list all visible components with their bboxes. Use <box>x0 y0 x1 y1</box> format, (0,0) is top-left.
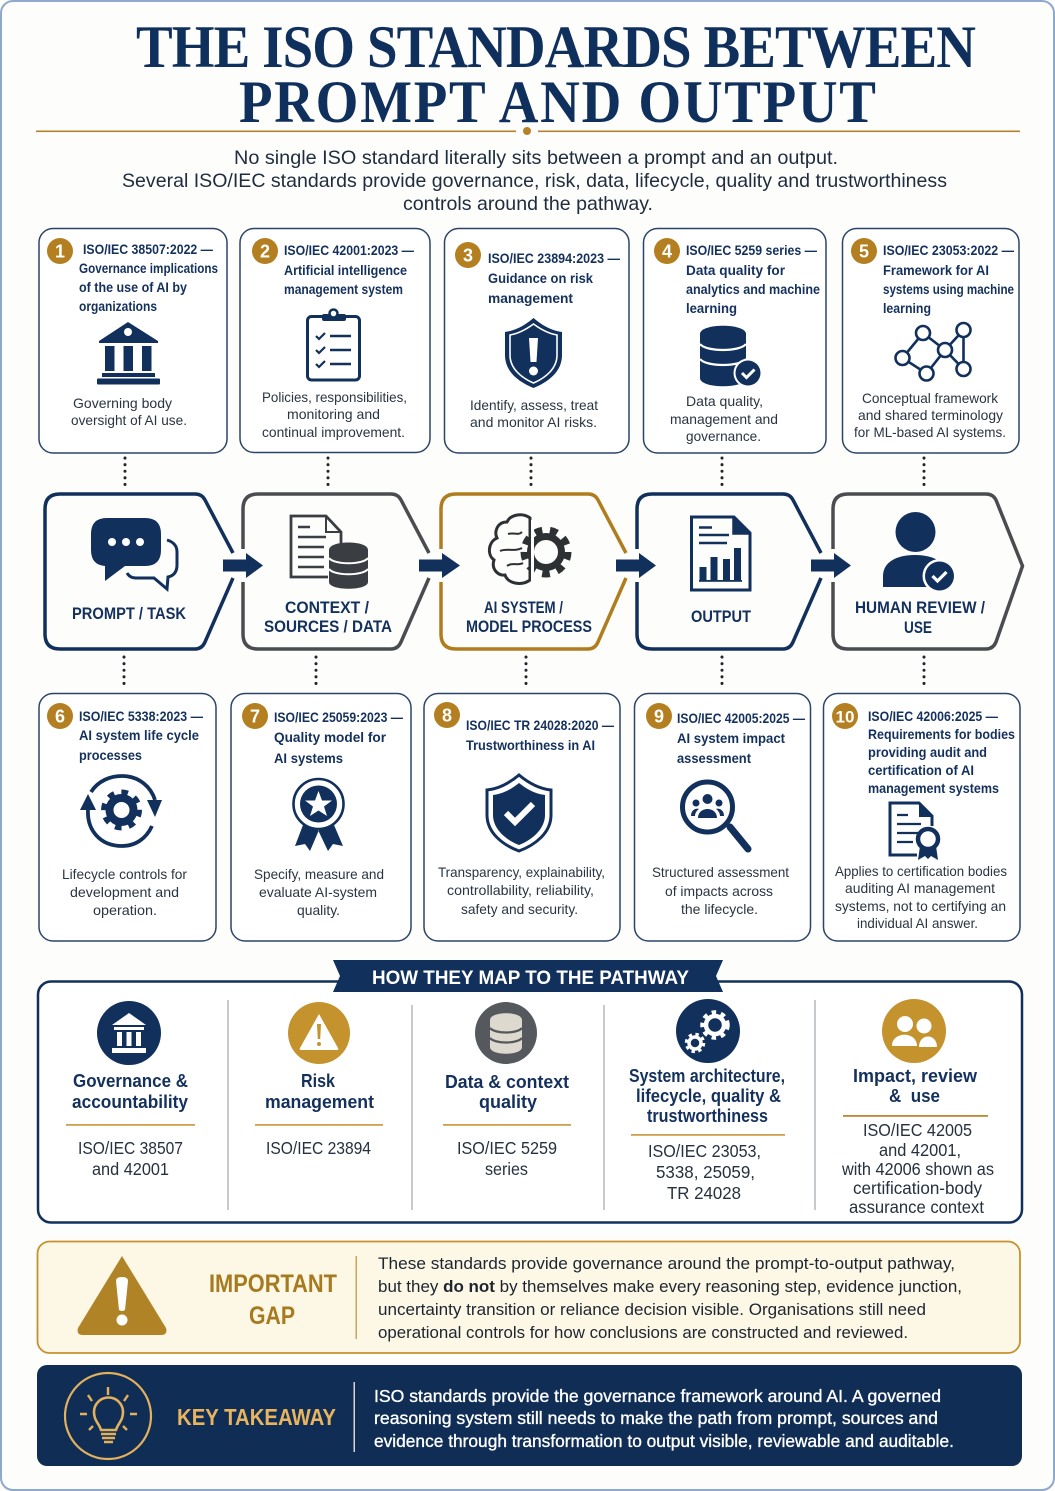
description: continual improvement. <box>262 424 405 440</box>
heading: ISO/IEC 23053:2022: systems using machine <box>883 281 1014 297</box>
heading: ISO/IEC 42006:2025: providing audit and <box>868 744 987 760</box>
heading: ISO/IEC 5259 series: analytics and machine <box>686 281 820 297</box>
badge 2 <box>252 238 278 264</box>
takeaway text: ISO standards provide the governance framework around AI. A governed <box>374 1386 941 1406</box>
heading: ISO/IEC 5259 series: learning <box>686 300 737 316</box>
icon: brain and gear <box>489 515 568 584</box>
gap text: uncertainty transition or reliance decision visible. Organisations still need <box>378 1300 926 1319</box>
description: and shared terminology <box>858 407 1003 423</box>
heading: ISO/IEC 23053:2022: Framework for AI <box>883 262 989 278</box>
column heading <box>629 1066 785 1126</box>
subtitle <box>122 147 947 215</box>
heading: ISO/IEC 42005:2025: AI system impact <box>677 730 785 746</box>
description <box>470 397 598 430</box>
standards list: ISO/IEC 42005 <box>863 1120 972 1140</box>
banner heading <box>333 960 723 992</box>
pathway step: human review / use <box>833 494 1022 649</box>
label <box>855 598 985 637</box>
description: controllability, reliability, <box>447 882 594 898</box>
column heading: Risk <box>301 1071 336 1091</box>
heading: ISO/IEC 25059:2023: Quality model for <box>274 729 387 745</box>
pathway step: prompt / task <box>45 494 233 649</box>
column heading: lifecycle, quality & <box>636 1086 781 1106</box>
column heading: Data & context <box>445 1072 569 1092</box>
badge 7: 7 <box>250 706 260 726</box>
label <box>466 598 592 636</box>
column heading <box>265 1071 374 1112</box>
heading: ISO/IEC 23053:2022: ISO/IEC 23053:2022 — <box>883 242 1014 258</box>
label <box>264 598 392 636</box>
standards list: ISO/IEC 23894 <box>266 1138 371 1158</box>
description <box>670 393 778 444</box>
label: SOURCES / DATA <box>264 617 392 636</box>
description: individual AI answer. <box>857 915 978 931</box>
badge 3: 3 <box>463 246 473 266</box>
column heading: Impact, review <box>853 1066 978 1086</box>
takeaway text: reasoning system still needs to make the path from prompt, sources and <box>374 1408 938 1428</box>
description: Policies, responsibilities, <box>262 389 407 405</box>
description <box>652 864 789 917</box>
takeaway text <box>374 1386 954 1451</box>
badge 5: 5 <box>859 242 869 262</box>
description: Structured assessment <box>652 864 789 880</box>
icon: clipboard checklist <box>308 310 360 380</box>
description <box>854 390 1006 440</box>
column heading: System architecture, <box>629 1066 785 1086</box>
description: management and <box>670 411 778 427</box>
badge 7 <box>242 703 268 729</box>
pathway step: context / sources / data <box>243 494 429 649</box>
pathway step: AI system / model process <box>441 494 626 649</box>
badge 9: 9 <box>654 706 664 726</box>
heading: ISO/IEC 42005:2025: ISO/IEC 42005:2025 — <box>677 710 805 726</box>
standards list: certification-body <box>853 1178 982 1198</box>
column: data <box>443 1002 571 1179</box>
arrow 1 <box>223 553 263 578</box>
standards list: with 42006 shown as <box>841 1159 994 1179</box>
badge 9 <box>646 703 672 729</box>
badge 6: 6 <box>55 706 65 726</box>
callout: key takeaway <box>37 1365 1022 1466</box>
heading: ISO/IEC 42001:2023: Artificial intelligence <box>284 262 407 278</box>
label: OUTPUT <box>691 607 752 626</box>
icon: shield with check <box>487 775 551 851</box>
heading: ISO/IEC 38507:2022 <box>79 241 218 314</box>
panel: standard 7 <box>231 694 411 941</box>
heading: ISO/IEC 25059:2023: ISO/IEC 25059:2023 — <box>274 709 403 725</box>
icon: certificate document <box>890 803 938 860</box>
label: CONTEXT / <box>285 598 369 617</box>
standards list <box>78 1138 183 1179</box>
panel: standard 2 <box>240 228 430 452</box>
badge 8 <box>434 702 460 728</box>
subtitle: No single ISO standard literally sits between a prompt and an output. <box>234 147 838 169</box>
column heading <box>72 1071 188 1112</box>
heading: ISO/IEC 23894:2023: Guidance on risk <box>488 270 593 286</box>
gap text: but they do not by themselves make every reasoning step, evidence junction, <box>378 1277 962 1296</box>
icon: institution building <box>97 322 160 384</box>
standards list: ISO/IEC 38507 <box>78 1138 183 1158</box>
description: Applies to certification bodies <box>835 863 1007 879</box>
heading: ISO/IEC 23894:2023: management <box>488 290 573 306</box>
description: for ML-based AI systems. <box>854 424 1006 440</box>
heading: ISO/IEC 42006:2025: certification of AI <box>868 762 974 778</box>
column heading: trustworthiness <box>647 1106 768 1126</box>
heading: ISO/IEC TR 24028:2020: Trustworthiness in AI <box>466 737 595 753</box>
heading: ISO/IEC 42006:2025: ISO/IEC 42006:2025 — <box>868 708 998 724</box>
heading: ISO/IEC 5259 series: ISO/IEC 5259 series — <box>686 242 817 258</box>
icon: light bulb <box>65 1373 151 1459</box>
column heading: accountability <box>72 1092 188 1112</box>
column heading <box>445 1072 569 1112</box>
label: PROMPT / TASK <box>72 604 187 623</box>
icon: magnifier over people <box>682 782 748 849</box>
description: Identify, assess, treat <box>470 397 598 413</box>
arrow 2 <box>419 553 460 578</box>
description: Data quality, <box>686 393 763 409</box>
icon: document and database <box>291 516 368 589</box>
icon: gears <box>676 999 740 1063</box>
panel: how they map to the pathway <box>38 960 1022 1222</box>
description: auditing AI management <box>845 880 995 896</box>
standards list: and 42001 <box>92 1159 169 1179</box>
column heading: management <box>265 1092 374 1112</box>
icon: warning triangle <box>78 1256 166 1335</box>
icon: rosette award <box>294 779 344 851</box>
panel: standard 3 <box>444 228 629 453</box>
gap heading <box>209 1270 337 1330</box>
callout: important gap <box>38 1242 1020 1353</box>
gap text: These standards provide governance around the prompt-to-output pathway, <box>378 1254 955 1273</box>
heading: ISO/IEC 5338:2023 <box>79 708 203 763</box>
standards list: and 42001, <box>879 1140 961 1160</box>
badge 3 <box>455 242 481 268</box>
description: Transparency, explainability, <box>438 864 605 880</box>
heading: ISO/IEC 38507:2022: organizations <box>79 298 157 314</box>
description <box>835 863 1007 931</box>
description <box>71 395 187 428</box>
gap text <box>378 1254 962 1342</box>
heading: ISO/IEC 25059:2023: AI systems <box>274 750 343 766</box>
icon: database with check <box>700 326 762 388</box>
heading: ISO/IEC 38507:2022: Governance implications <box>79 260 218 276</box>
label: AI SYSTEM / <box>484 598 563 617</box>
subtitle: Several ISO/IEC standards provide governance, risk, data, lifecycle, quality and trustworthiness <box>122 170 947 192</box>
heading: ISO/IEC 42006:2025 <box>868 708 1015 796</box>
heading: ISO/IEC 42006:2025: management systems <box>868 780 999 796</box>
description: Specify, measure and <box>254 866 384 882</box>
icon: warning <box>288 1002 350 1064</box>
heading: ISO/IEC 42001:2023: ISO/IEC 42001:2023 — <box>284 242 414 258</box>
gap heading: IMPORTANT <box>209 1270 337 1298</box>
description: Conceptual framework <box>862 390 999 406</box>
description: Governing body <box>73 395 172 411</box>
badge 8: 8 <box>442 706 452 726</box>
arrow 3 <box>616 553 656 578</box>
description <box>262 389 407 440</box>
description: development and <box>70 884 179 900</box>
heading: ISO/IEC TR 24028:2020: ISO/IEC TR 24028:2020 — <box>466 717 614 733</box>
description: systems, not to certifying an <box>835 898 1006 914</box>
description: governance. <box>686 428 761 444</box>
panel: standard 6 <box>39 694 216 941</box>
badge 5 <box>851 238 877 264</box>
title: THE ISO STANDARDS BETWEEN <box>136 13 976 81</box>
panel: standard 9 <box>634 694 810 941</box>
badge 1 <box>47 238 73 264</box>
description: quality. <box>297 902 340 918</box>
column: system architecture <box>629 999 785 1203</box>
heading: ISO/IEC 25059:2023 <box>274 709 403 766</box>
standards list <box>841 1120 994 1217</box>
pathway step: output <box>637 494 821 649</box>
panel: standard 4 <box>644 228 826 453</box>
description: the lifecycle. <box>681 901 758 917</box>
description <box>254 866 384 918</box>
arrow 4 <box>811 553 851 578</box>
description <box>438 864 605 917</box>
badge 1: 1 <box>55 242 65 262</box>
icon: gear with cycle arrows <box>80 776 162 846</box>
heading: ISO/IEC 38507:2022: ISO/IEC 38507:2022 — <box>83 241 213 257</box>
badge 10: 10 <box>836 708 854 726</box>
column: governance <box>66 1001 195 1179</box>
icon: network graph <box>896 323 970 380</box>
badge 2: 2 <box>260 242 270 262</box>
description: and monitor AI risks. <box>470 414 597 430</box>
takeaway text: evidence through transformation to output visible, reviewable and auditable. <box>374 1431 954 1451</box>
subtitle: controls around the pathway. <box>403 193 653 215</box>
heading: ISO/IEC 5259 series: Data quality for <box>686 262 786 278</box>
description: evaluate AI-system <box>259 884 377 900</box>
panel: standard 5 <box>842 228 1019 453</box>
label: HUMAN REVIEW / <box>855 598 985 617</box>
description: Lifecycle controls for <box>62 866 187 882</box>
icon: chat bubbles <box>91 518 177 589</box>
heading: ISO/IEC 42001:2023: management system <box>284 281 403 297</box>
title: PROMPT AND OUTPUT <box>239 68 876 136</box>
heading: ISO/IEC 42005:2025: assessment <box>677 750 751 766</box>
icon: report document with bars <box>692 517 750 590</box>
heading: ISO/IEC 42005:2025 <box>677 710 805 766</box>
icon: people <box>882 999 946 1063</box>
icon: person with check <box>883 512 956 593</box>
standards list: series <box>485 1159 528 1179</box>
banner heading: HOW THEY MAP TO THE PATHWAY <box>372 968 689 989</box>
standards list: 5338, 25059, <box>656 1162 755 1182</box>
column heading: & use <box>889 1086 940 1106</box>
column heading: Governance & <box>73 1071 188 1091</box>
gap heading: GAP <box>249 1302 295 1330</box>
column heading: quality <box>479 1092 537 1112</box>
standards list: ISO/IEC 23053, <box>648 1141 761 1161</box>
heading: ISO/IEC 5338:2023: processes <box>79 747 142 763</box>
heading: ISO/IEC 42001:2023 <box>284 242 414 297</box>
description <box>62 866 187 918</box>
description: safety and security. <box>461 901 578 917</box>
standards list: TR 24028 <box>667 1183 741 1203</box>
column: impact, review and use <box>841 999 994 1217</box>
badge 4 <box>654 238 680 264</box>
badge 4: 4 <box>662 242 672 262</box>
heading: ISO/IEC 23053:2022: learning <box>883 300 931 316</box>
column heading <box>853 1066 978 1106</box>
heading: ISO/IEC 23894:2023 <box>488 250 620 306</box>
description: operation. <box>93 902 157 918</box>
heading: ISO/IEC 23053:2022 <box>883 242 1014 316</box>
badge 6 <box>47 703 73 729</box>
heading: ISO/IEC TR 24028:2020 <box>466 717 614 753</box>
badge 10 <box>832 703 858 729</box>
standards list <box>648 1141 761 1203</box>
panel: standard 10 <box>824 694 1020 941</box>
title <box>136 13 976 136</box>
heading: ISO/IEC 5338:2023: ISO/IEC 5338:2023 — <box>79 708 203 724</box>
heading: ISO/IEC 23894:2023: ISO/IEC 23894:2023 — <box>488 250 620 266</box>
standards list: ISO/IEC 5259 <box>457 1138 557 1158</box>
label: MODEL PROCESS <box>466 617 592 636</box>
icon: shield with exclamation <box>505 318 562 388</box>
panel: standard 1 <box>39 228 227 453</box>
heading: ISO/IEC 42006:2025: Requirements for bodies <box>868 726 1015 742</box>
description: of impacts across <box>665 883 773 899</box>
description: monitoring and <box>287 406 380 422</box>
heading: ISO/IEC 5338:2023: AI system life cycle <box>79 727 199 743</box>
description: oversight of AI use. <box>71 412 187 428</box>
heading: ISO/IEC 5259 series <box>686 242 820 316</box>
icon: database <box>475 1002 537 1064</box>
label: USE <box>904 618 932 637</box>
column: risk <box>255 1002 383 1158</box>
standards list <box>457 1138 557 1179</box>
takeaway heading: KEY TAKEAWAY <box>177 1404 336 1430</box>
icon: institution <box>97 1001 161 1065</box>
gap text: operational controls for how conclusions are constructed and reviewed. <box>378 1323 908 1342</box>
standards list: assurance context <box>849 1197 984 1217</box>
heading: ISO/IEC 38507:2022: of the use of AI by <box>79 279 187 295</box>
panel: standard 8 <box>424 694 620 941</box>
